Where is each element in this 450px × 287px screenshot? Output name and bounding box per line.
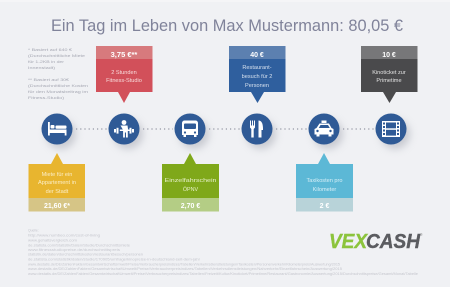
sources: Quelle: xyxy=(28,228,39,232)
panel: ÖPNV: 2,70 € xyxy=(181,203,200,210)
panel: Fitness-Studio xyxy=(96,46,152,103)
footnotes: für den Monatsbeitrag im xyxy=(28,89,89,94)
panel: Fitness-Studio: Fitness-Studio xyxy=(106,78,142,84)
logo: VEXCASH xyxy=(329,231,423,253)
sources: de.statista.com/Statistik/Daten/Studie/Durchschnittsmiete xyxy=(28,244,130,248)
panel: ÖPNV: Einzelfahrschein xyxy=(164,178,216,184)
panel: Taxikosten: Kilometer xyxy=(313,187,336,193)
panel: Restaurant: Restaurant- xyxy=(242,65,272,71)
icon: weightlifter xyxy=(108,114,143,149)
icon: taxi xyxy=(308,114,343,149)
panel: Taxikosten: 2 € xyxy=(320,203,329,210)
footnotes xyxy=(28,47,89,100)
icon: film strip xyxy=(376,114,410,149)
panel: Restaurant: Personen xyxy=(245,83,269,89)
sources: http://www.numbeo.com/cost-of-living xyxy=(28,234,100,238)
title: Ein Tag im Leben von Max Mustermann: 80,05 € xyxy=(51,17,403,35)
footnotes: (Durchschnittliche Kosten xyxy=(28,83,88,88)
panel: Restaurant: 40 € xyxy=(250,52,264,59)
panel: Kinoticket: Primetime xyxy=(376,78,402,84)
panel: ÖPNV xyxy=(162,153,219,212)
logo: VEXCASH: ® xyxy=(420,233,423,237)
panel: Kinoticket: 10 € xyxy=(382,52,396,59)
icon: bed xyxy=(42,114,76,149)
sources: statistik.de/daten/durchschnittskosten/restaurantbesuch/personen xyxy=(28,252,143,256)
panel: Restaurant: besuch für 2 xyxy=(242,74,272,80)
footnotes: Fitness-Studio) xyxy=(28,95,65,100)
panel: Fitness-Studio: 2 Stunden xyxy=(111,70,137,76)
panel: Miete: 21,60 €* xyxy=(44,203,70,210)
icon: cutlery xyxy=(242,114,276,149)
footnotes: * Basiert auf 640 € xyxy=(28,47,73,52)
icon: bus xyxy=(174,114,209,149)
panel: Fitness-Studio: 3,75 €** xyxy=(111,50,137,59)
footnotes: ** Basiert auf 30€ xyxy=(28,77,70,82)
panel: Kinoticket xyxy=(361,46,418,103)
panel: Kinoticket: Kinoticket zur xyxy=(372,70,406,76)
dotted timeline xyxy=(76,128,374,130)
panel: Miete: der Stadt xyxy=(46,189,69,195)
logo: VEXCASH: CASH xyxy=(366,231,421,253)
panel: Restaurant xyxy=(229,46,286,103)
panel: Miete: Miete für ein xyxy=(42,172,72,178)
sources: www.destatis.de/DE/ZahlenFakten/GesamtwirtschaftUmwelt/Preise/Verbraucherpreisindizes/Tabellen/Verkehrsdienstleistungen/Nahverkehr/Einzelfahrschein/Auswertung/2015 xyxy=(28,267,342,271)
sources: de.statista.com/statistik/daten/studie/170905/umfrage/kinopreise-in-deutschland-seit-dem-jahr xyxy=(28,258,201,262)
footnotes: für 1-2KB in der xyxy=(28,59,65,64)
panel: ÖPNV: ÖPNV xyxy=(183,186,199,193)
panel: Miete: Appartement in xyxy=(38,180,76,186)
sources: www.destatis.de/DE/ZahlenFakten/GesamtwirtschaftUmwelt/Preise/Verbraucherpreisindizes/Tabellen/Verkehrsdienstleistungen/Taxikosten/Personenverkehr/Kilometerpreis/Auswertung/2015 xyxy=(28,262,340,266)
logo: VEXCASH: VEX xyxy=(329,231,369,253)
sources: www.fitnessstudiopreise.de/durchschnittspreis xyxy=(28,248,120,252)
footnotes: Innenstadt) xyxy=(28,65,56,70)
footnotes: (Durchschnittliche Miete xyxy=(28,53,86,58)
sources: www.destatis.de/DE/ZahlenFakten/GesamtwirtschaftUmwelt/Preise/Verbraucherpreisindizes/Tabellen/Freizeit/Kultur/Kinoticket/Primetime/Restaurant/Gastronomie/Auswertung/2015/Durchschnittspreise/Gesamt/Monat/Tabelle xyxy=(28,272,418,276)
sources: www.gehaltsvergleich.com xyxy=(28,238,77,242)
panel: Miete xyxy=(28,153,85,212)
panel: Taxikosten: Taxikosten pro xyxy=(306,178,343,184)
panel: Taxikosten xyxy=(296,153,353,212)
sources xyxy=(28,228,418,276)
